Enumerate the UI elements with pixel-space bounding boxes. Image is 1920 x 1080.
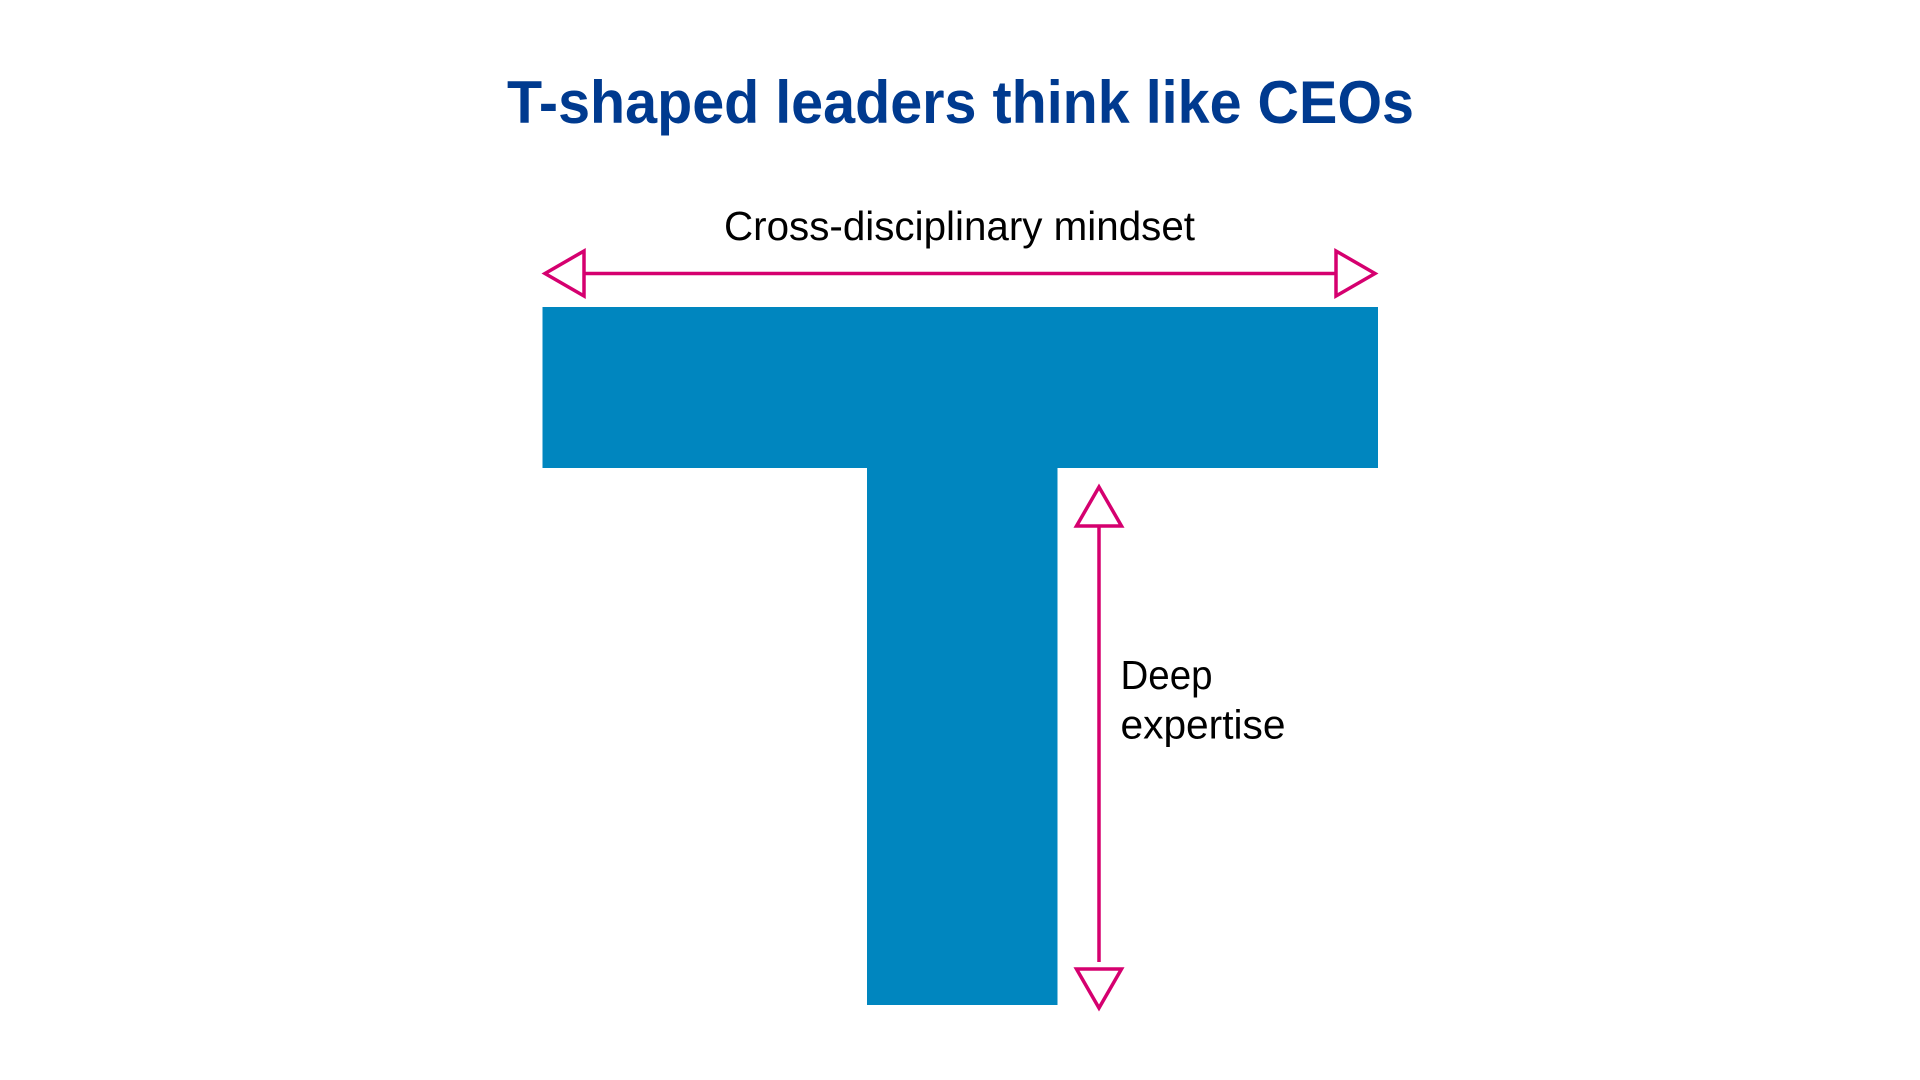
label: deep expertise: Deep — [1120, 652, 1212, 698]
label: deep expertise: expertise — [1120, 702, 1286, 748]
arrow: vertical double-headed — [1076, 487, 1122, 1008]
label: cross-disciplinary mindset: Cross-disciplinary mindset — [724, 203, 1196, 249]
label: deep expertise — [1120, 652, 1286, 748]
arrow: horizontal double-headed — [545, 251, 1375, 296]
title: T-shaped leaders think like CEOs — [507, 69, 1414, 136]
T shape — [542, 307, 1378, 1005]
